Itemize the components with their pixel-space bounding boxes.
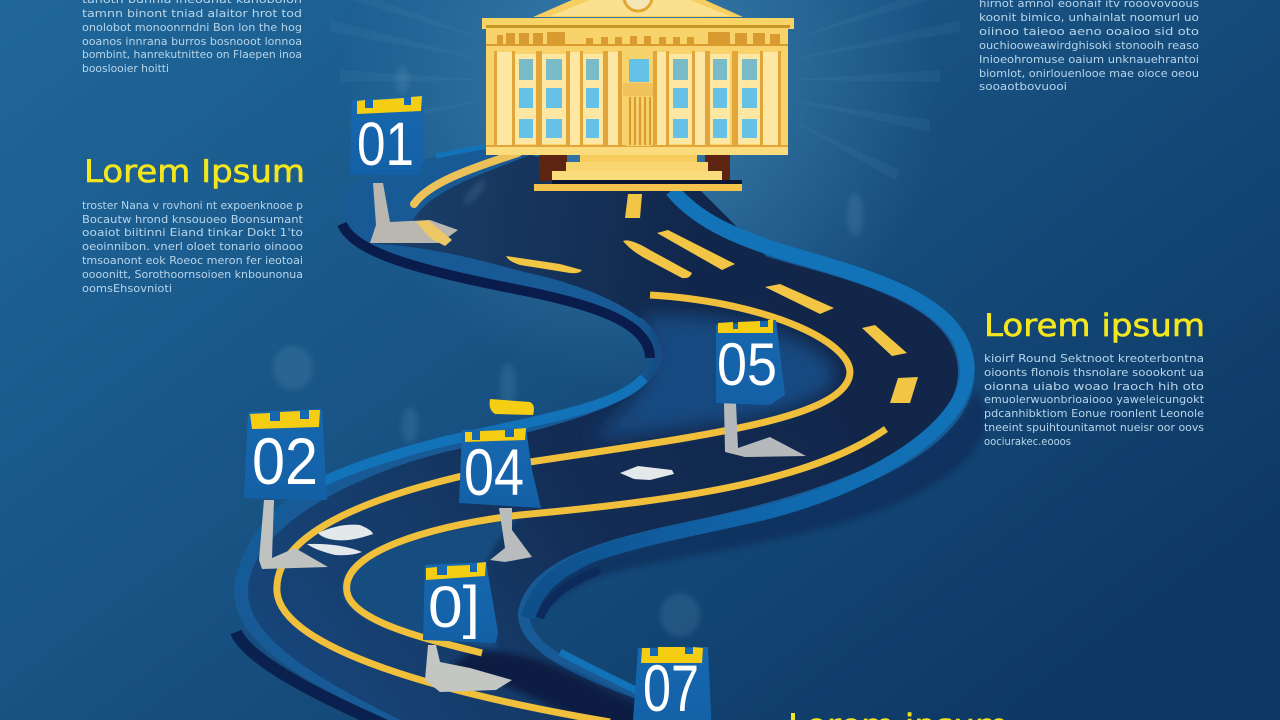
pediment: [533, 0, 743, 17]
road yellow lines: [277, 153, 886, 720]
steps: [534, 155, 742, 191]
text block: left: troster Nana v rovhoni nt expoenknooe p: [82, 199, 303, 212]
ghost silhouettes: [273, 66, 863, 637]
text block: left: Bocautw hrond knsouoeo Boonsumant: [82, 213, 304, 226]
text block: top left: booslooier hoitti: [82, 62, 169, 75]
text block: left: oomsEhsovnioti: [82, 282, 172, 295]
windows: [519, 59, 757, 138]
text block: top right: Inioeohromuse oaium unknauehrantoi: [979, 53, 1199, 66]
text block: right: oociurakec.eooos: [984, 435, 1071, 448]
text block: right: pdcanhibktiom Eonue roonlent Leonole: [984, 407, 1204, 420]
road: [234, 145, 975, 720]
text block: right: [984, 352, 1205, 448]
text block: top left: ooanos innrana burros bosnooot lonnoa: [82, 35, 302, 48]
road dashes: [506, 194, 918, 403]
text block: left: oooonitt, Sorothoornsoioen knbounonua: [82, 268, 303, 281]
road navy edge: [342, 224, 650, 358]
text block: top right: koonit bimico, unhainlat noomurl uo: [979, 11, 1199, 24]
road notch shadow: [540, 570, 600, 618]
text block: top left: [82, 0, 302, 75]
text block: left: tmsoanont eok Roeoc meron fer ieotoai: [82, 254, 303, 267]
text block: right: oionna uiabo woao lraoch hih oto: [984, 380, 1204, 393]
facade: [486, 29, 788, 154]
text block: top right: [979, 0, 1199, 93]
road markings white: [307, 466, 674, 555]
text block: right: emuolerwuonbrioaiooo yaweleicungokt: [984, 393, 1205, 406]
text block: top left: tamnn binont tniad alaitor hrot tod: [82, 7, 302, 20]
base plinth: [486, 147, 788, 155]
frieze: [486, 32, 788, 46]
text block: left: ooaiot biitinni Eiand tinkar Dokt 1'to: [82, 226, 303, 239]
signpost 05: 05: [717, 331, 777, 398]
signpost 04: 04: [464, 435, 524, 509]
signpost 03: [423, 562, 512, 692]
door: [623, 83, 653, 146]
signpost 01: [350, 96, 458, 246]
text block: top right: sooaotbovuooi: [979, 80, 1067, 93]
signpost 03: 0]: [428, 575, 480, 640]
building glow and rays: [330, 0, 960, 390]
building: [482, 0, 794, 191]
road shadow: [530, 390, 986, 620]
heading: right: Lorem ipsum: [984, 308, 1205, 344]
dark piers: [539, 155, 730, 181]
signpost 02: [244, 409, 328, 569]
text block: top left: bombint, hanrekutnitteo on Flaepen inoa: [82, 48, 302, 61]
cornice: [482, 18, 794, 29]
heading: left: Lorem Ipsum: [84, 154, 305, 190]
signpost 01: 01: [357, 110, 414, 178]
text block: right: oioonts flonois thsnolare soookont ua: [984, 366, 1204, 379]
text block: top left: onolobot monoonrndni Bon lon the hog: [82, 21, 302, 34]
signpost 05: [716, 320, 806, 457]
text block: right: kioirf Round Sektnoot kreoterbontna: [984, 352, 1204, 365]
text block: right: tneeint spuihtounitamot nueisr oor oovs: [984, 421, 1204, 434]
text block: top right: ouchiooweawirdghisoki stonooih reaso: [979, 39, 1199, 52]
signpost 02: 02: [252, 424, 318, 498]
text block: left: [82, 199, 304, 295]
signpost 04: [459, 399, 541, 562]
text block: left: oeoinnibon. vnerl oloet tonario oinooo: [82, 240, 303, 253]
text block: top right: oiinoo taieoo aeno ooaioo sid oto: [979, 25, 1199, 38]
text block: top right: biomlot, onirlouenlooe mae oioce oeou: [979, 67, 1199, 80]
road bright edges: [240, 146, 967, 692]
columns and frames: [486, 51, 788, 147]
